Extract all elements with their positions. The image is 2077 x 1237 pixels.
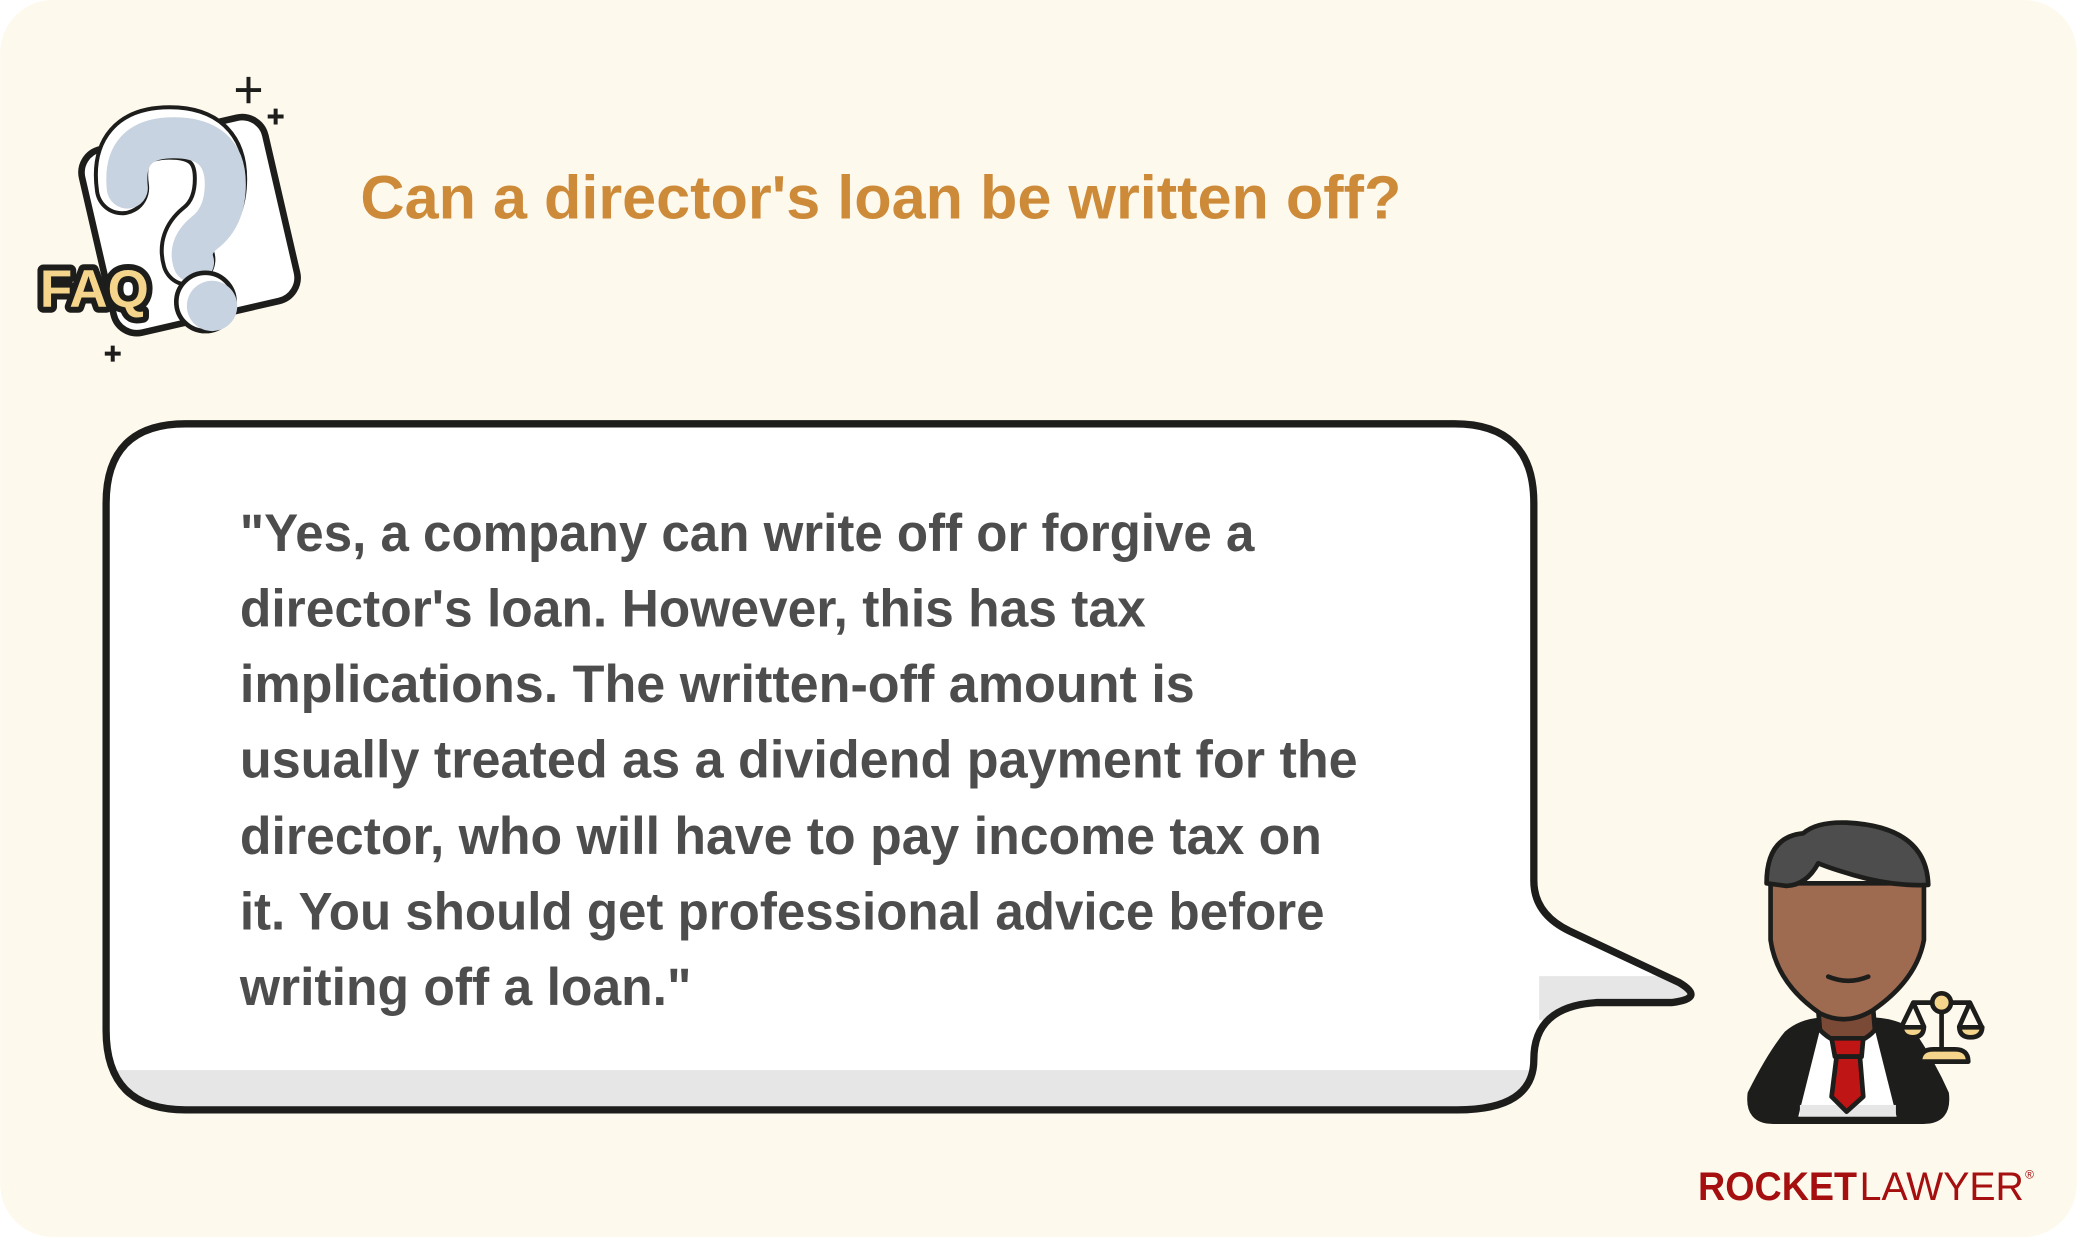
quote text: it. You should get professional advice before [240, 883, 1325, 942]
speech bubble [93, 424, 1722, 1123]
icon: FAQ question [40, 77, 302, 362]
icon: FAQ question: FAQ [40, 260, 149, 319]
quote text [239, 504, 1358, 1017]
logo: LAWYER [1860, 1165, 2024, 1209]
quote text: "Yes, a company can write off or forgive a [240, 504, 1255, 563]
icon: lawyer person [1750, 823, 1982, 1122]
quote text: usually treated as a dividend payment for the [240, 730, 1358, 789]
logo [1698, 1165, 2034, 1209]
quote text: writing off a loan." [239, 958, 692, 1017]
title: Can a director's loan be written off? [360, 164, 1401, 232]
quote text: implications. The written-off amount is [240, 655, 1195, 714]
quote text: director, who will have to pay income tax on [240, 807, 1322, 866]
logo: ® [2025, 1168, 2034, 1182]
logo: ROCKET [1698, 1165, 1857, 1209]
quote text: director's loan. However, this has tax [240, 579, 1146, 638]
